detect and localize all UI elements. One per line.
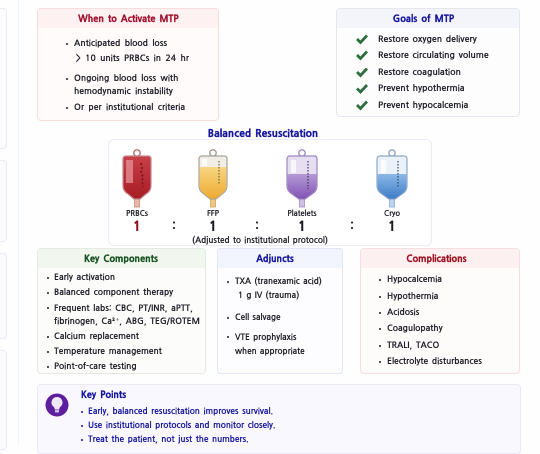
panel: when to activate MTP — [37, 8, 219, 121]
list: goals with checks: Prevent hypothermia — [378, 85, 465, 93]
icon: cryo bag — [376, 149, 408, 208]
labels: blood products: FFP — [207, 210, 219, 218]
list: goals with checks: Restore oxygen delivery — [378, 36, 477, 44]
list: components: Frequent labs: CBC, PT/INR, aPTT, — [54, 304, 193, 312]
heading: key points: Key Points — [81, 390, 126, 400]
list: key points — [81, 407, 275, 444]
panel: complications — [360, 248, 520, 374]
labels: blood products: PRBCs — [126, 210, 148, 218]
list: activation criteria: Anticipated blood loss — [74, 40, 167, 48]
list: components: Balanced component therapy — [54, 289, 173, 297]
list: complications: Acidosis — [387, 308, 419, 316]
list: key points: Use institutional protocols and monitor closely. — [88, 422, 275, 430]
labels: blood products — [126, 210, 400, 218]
panel: key points — [37, 384, 521, 454]
list: activation criteria: hemodynamic instability — [74, 88, 173, 96]
ratio numbers: 1 — [209, 219, 217, 233]
panel: adjuncts — [217, 248, 343, 374]
list: goals with checks: Prevent hypocalcemia — [378, 102, 468, 110]
list: complications: Hypocalcemia — [387, 276, 442, 284]
ratio numbers — [133, 219, 396, 233]
list: adjuncts: when appropriate — [235, 348, 305, 356]
list: complications: TRALI, TACO — [387, 342, 439, 350]
list: adjuncts: 1 g IV (trauma) — [238, 292, 299, 300]
labels: blood products: Platelets — [287, 210, 317, 218]
icon: platelets bag — [286, 149, 318, 208]
list: components: Temperature management — [54, 348, 162, 356]
list: goals with checks — [356, 34, 489, 110]
list: components — [47, 273, 200, 371]
note: adjusted to protocol: (Adjusted to institutional protocol) — [192, 236, 328, 244]
heading: key components: Key Components — [84, 254, 158, 264]
list: key points: Early, balanced resuscitation improves survival. — [88, 408, 273, 416]
ratio numbers: 1 — [388, 219, 396, 233]
list: key points: Treat the patient, not just the numbers. — [88, 436, 249, 444]
ratio numbers: : — [255, 220, 259, 232]
list: components: Early activation — [54, 274, 115, 282]
list: complications — [379, 275, 482, 366]
list: complications: Hypothermia — [387, 292, 438, 300]
heading: balanced resuscitation: Balanced Resuscitation — [208, 129, 318, 139]
icon: FFP bag — [198, 149, 228, 208]
list: activation criteria: > 10 units PRBCs in 24 hr — [76, 55, 189, 63]
decorative left panels — [0, 0, 19, 450]
list: components: Point-of-care testing — [54, 363, 137, 371]
list: complications: Coagulopathy — [387, 325, 443, 333]
labels: blood products: Cryo — [384, 210, 400, 218]
list: components: fibrinogen, Ca²⁺, ABG, TEG/ROTEM — [54, 318, 200, 326]
list: adjuncts: Cell salvage — [235, 314, 281, 322]
list: goals with checks: Restore coagulation — [378, 68, 461, 76]
list: adjuncts: VTE prophylaxis — [235, 334, 296, 342]
heading: complications: Complications — [406, 254, 467, 264]
heading: adjuncts: Adjuncts — [256, 254, 294, 264]
heading: goals: Goals of MTP — [393, 14, 454, 24]
list: activation criteria — [66, 39, 189, 112]
list: adjuncts — [227, 276, 322, 356]
list: components: Calcium replacement — [54, 333, 139, 341]
panel: key components — [37, 248, 206, 374]
ratio numbers: : — [350, 220, 354, 232]
list: activation criteria: Ongoing blood loss with — [74, 75, 178, 83]
ratio numbers: 1 — [133, 219, 141, 233]
ratio numbers: : — [172, 220, 176, 232]
list: adjuncts: TXA (tranexamic acid) — [235, 278, 322, 286]
panel: ratio — [108, 139, 432, 246]
list: complications: Electrolyte disturbances — [387, 358, 482, 366]
heading: when to activate: When to Activate MTP — [78, 14, 179, 24]
icon: light bulb — [46, 394, 68, 416]
icon: PRBC bag — [122, 149, 152, 208]
list: activation criteria: Or per institutional criteria — [74, 104, 185, 112]
list: goals with checks: Restore circulating volume — [378, 52, 489, 60]
ratio numbers: 1 — [298, 219, 306, 233]
panel: goals of MTP — [336, 8, 520, 117]
